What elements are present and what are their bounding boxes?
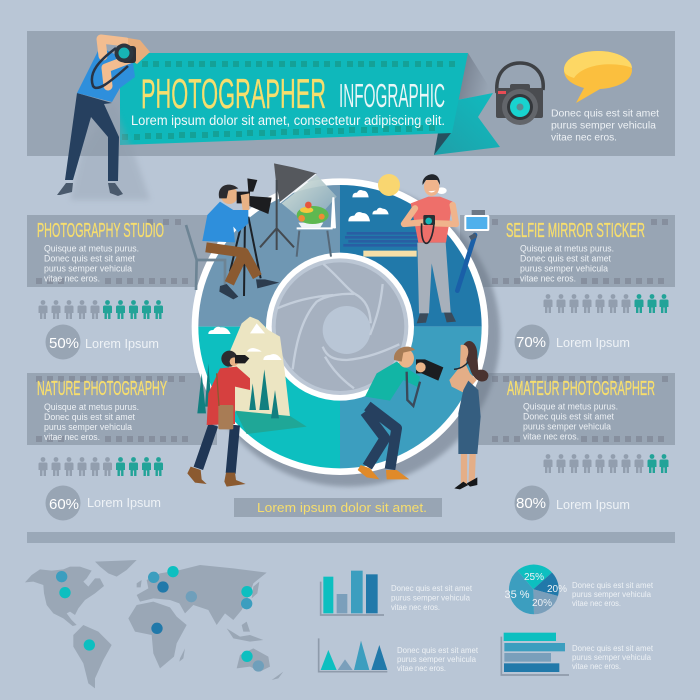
continents: [25, 560, 283, 688]
food table: [297, 197, 335, 228]
panel: photography studio band: [27, 215, 217, 287]
banner film holes: [122, 61, 455, 140]
hands: [128, 38, 150, 64]
stat: 80%: [514, 486, 630, 520]
body: [523, 402, 618, 442]
bar chart text: [391, 584, 473, 612]
body: [520, 244, 614, 284]
section divider bar: [27, 532, 675, 543]
caption bar: Lorem ipsum dolor sit amet.: [257, 500, 427, 515]
panel text: photography studio: [37, 220, 164, 284]
body: Quisque at metus purus.: [44, 244, 139, 254]
arms: [404, 205, 456, 224]
panel: amateur photographer band: [460, 373, 675, 445]
triangle chart text: Donec quis est sit amet: [397, 646, 479, 655]
head: [221, 351, 237, 367]
stat: 50%: Lorem Ipsum: [85, 336, 159, 351]
trees: [197, 363, 279, 418]
camera: [235, 355, 249, 363]
pie chart text: [572, 581, 654, 608]
tripod: [230, 217, 261, 296]
header text block: purus semper vehicula: [551, 120, 656, 132]
head: [221, 187, 238, 204]
pie chart text: Donec quis est sit amet: [572, 581, 654, 590]
body: vitae nec eros.: [523, 432, 579, 442]
panel text: nature photography: [37, 378, 167, 442]
stat: 60%: [46, 486, 161, 520]
caption bar: [234, 498, 442, 517]
horizontal bar chart: [501, 633, 569, 675]
hand: [241, 193, 249, 210]
banner ribbon tail: [434, 93, 500, 155]
stat: 80%: 80%: [516, 495, 546, 512]
banner fold: [434, 133, 451, 155]
shoes: [57, 183, 123, 196]
pie labels: 20%: [547, 584, 567, 595]
horizontal bar chart text: vitae nec eros.: [572, 662, 621, 671]
panel: header band: [27, 31, 675, 156]
quadrant: nature: [198, 327, 340, 468]
strap: [407, 372, 420, 406]
body: Quisque at metus purus.: [523, 402, 618, 412]
triangle chart text: purus semper vehicula: [397, 655, 476, 664]
location dots: [56, 566, 264, 672]
title: photographer: PHOTOGRAPHER: [141, 70, 326, 117]
panel: selfie mirror sticker band: [460, 215, 675, 287]
icon: camera with strap: [496, 63, 543, 125]
heading: NATURE PHOTOGRAPHY: [37, 378, 167, 400]
shirt: [411, 197, 453, 243]
sun: [378, 174, 400, 196]
trousers: [206, 247, 257, 283]
quadrant: amateur: [340, 327, 482, 468]
shoes: [417, 313, 456, 323]
bar chart text: vitae nec eros.: [391, 603, 440, 612]
pie labels: 25%: [524, 572, 544, 583]
stat: 70%: [514, 324, 630, 360]
horizontal bar chart text: [572, 644, 654, 671]
white ring: [192, 178, 488, 475]
head and shoulders: [449, 345, 477, 393]
stat: 70%: Lorem Ipsum: [556, 335, 630, 350]
strap and camera: [422, 223, 434, 243]
quadrant: studio: [198, 185, 340, 327]
softbox: [274, 163, 317, 203]
woman being photographed: [449, 341, 488, 489]
jacket: [207, 367, 250, 425]
body: vitae nec eros.: [44, 432, 100, 442]
hair: [462, 341, 488, 382]
pie labels: 35 %: [504, 589, 530, 601]
man taking selfie: [404, 174, 456, 323]
stat: 70%: 70%: [516, 334, 546, 351]
horizontal bar chart text: Donec quis est sit amet: [572, 644, 654, 653]
triangle chart text: [397, 646, 479, 673]
horizontal bar chart text: purus semper vehicula: [572, 653, 651, 662]
trousers: [365, 406, 397, 469]
bar chart: [321, 571, 384, 615]
cloud: [437, 187, 447, 194]
body: vitae nec eros.: [44, 274, 100, 284]
photographer standing in header: [57, 38, 150, 200]
scene: sky and sea: [343, 174, 418, 257]
panel text: amateur photographer: [507, 378, 655, 442]
triangle chart text: vitae nec eros.: [397, 664, 446, 673]
heading: PHOTOGRAPHY STUDIO: [37, 220, 164, 242]
people row: 50%: [38, 300, 163, 319]
scene: studio softbox and food: [260, 163, 337, 257]
triangle chart: [319, 638, 387, 672]
mountain: [228, 317, 290, 417]
head: [398, 349, 414, 368]
pie chart text: purus semper vehicula: [572, 590, 651, 599]
hand: [416, 362, 426, 372]
aperture icon: [266, 253, 414, 401]
banner body: [120, 53, 468, 145]
boots: [187, 467, 246, 487]
title banner: INFOGRAPHIC: [339, 77, 445, 114]
icon: speech bubble: [564, 51, 632, 103]
light cone: [282, 175, 337, 227]
shoes: [358, 465, 409, 479]
header text block: vitae nec eros.: [551, 132, 617, 144]
pie chart: [504, 565, 567, 614]
people row: 80%: [544, 454, 668, 473]
head: [424, 177, 439, 196]
scene: mountain landscape: [197, 317, 307, 434]
body: vitae nec eros.: [520, 274, 576, 284]
bar chart text: purus semper vehicula: [391, 594, 470, 602]
body: purus semper vehicula: [44, 264, 133, 274]
central circle with photographers: [186, 163, 500, 489]
body: purus semper vehicula: [44, 422, 133, 432]
panel: nature photography band: [27, 373, 217, 445]
bag: [218, 405, 233, 429]
body: [44, 402, 139, 442]
body: Donec quis est sit amet: [44, 254, 135, 264]
pie labels: [504, 572, 567, 609]
ground: [235, 411, 307, 434]
header text block: Donec quis est sit amet: [551, 108, 659, 120]
heels: [454, 477, 477, 489]
world map: [25, 560, 283, 688]
trousers: [65, 93, 119, 181]
header text block: [551, 108, 659, 144]
photographer in red jacket: [187, 351, 250, 487]
body: Donec quis est sit amet: [520, 254, 611, 264]
stat: 60%: 60%: [49, 496, 79, 513]
camera: [114, 44, 136, 63]
body: Donec quis est sit amet: [523, 412, 614, 422]
necklace: [454, 362, 468, 369]
stat: 50%: [46, 324, 159, 360]
photographer seated with tripod: [186, 178, 279, 299]
body: purus semper vehicula: [523, 422, 612, 432]
people row: 60%: [38, 457, 163, 476]
bar chart text: Donec quis est sit amet: [391, 584, 473, 593]
trousers: [417, 243, 451, 313]
shoes: [219, 279, 279, 299]
body: Donec quis est sit amet: [44, 412, 135, 422]
people row: 70%: [544, 294, 668, 313]
panel text: selfie mirror sticker: [506, 220, 645, 284]
stat: 80%: Lorem Ipsum: [556, 497, 630, 512]
pie chart text: vitae nec eros.: [572, 599, 621, 608]
legs: [464, 453, 473, 485]
dress: [458, 381, 481, 454]
figure shadow: [70, 102, 150, 200]
camera: [416, 359, 443, 381]
body: Quisque at metus purus.: [44, 402, 139, 412]
camera strap: [92, 48, 128, 88]
title banner: [120, 53, 500, 155]
chair: [186, 225, 225, 290]
camera lens: [249, 196, 272, 214]
quadrant: selfie: [340, 185, 482, 327]
body: Quisque at metus purus.: [520, 244, 614, 254]
light stand: [260, 180, 294, 250]
circle shadow: [197, 183, 500, 487]
shirt: [77, 47, 135, 102]
body: purus semper vehicula: [520, 264, 609, 274]
stat: 60%: Lorem Ipsum: [87, 495, 161, 510]
selfie stick with phone: [457, 210, 489, 291]
pie labels: 20%: [532, 598, 552, 609]
camera body: [237, 178, 257, 203]
shirt: [365, 362, 420, 401]
snow clouds: [208, 323, 282, 360]
photographer crouching in teal shirt: [358, 347, 443, 479]
trousers: [198, 425, 235, 473]
stat: 50%: 50%: [49, 335, 79, 352]
subtitle: Lorem ipsum dolor sit amet, consectetur adipiscing elit.: [131, 113, 445, 128]
shirt: [202, 202, 248, 242]
arms: [101, 39, 132, 86]
salad plate: [298, 223, 323, 228]
body: [44, 244, 139, 284]
